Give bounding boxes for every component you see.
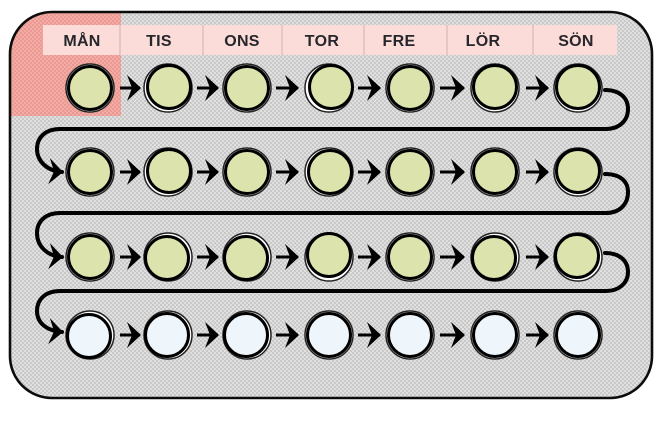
weekday header: MÅN xyxy=(63,31,101,50)
weekday header xyxy=(43,25,617,55)
day arrows xyxy=(120,88,548,335)
highlighted corner for current day xyxy=(10,12,121,116)
weekday header: ONS xyxy=(224,33,260,50)
weekday header: LÖR xyxy=(466,31,500,50)
weekday header: SÖN xyxy=(558,31,594,50)
weekday header: FRE xyxy=(383,33,415,50)
pills: inactive row xyxy=(66,311,602,359)
weekday header: TIS xyxy=(146,33,172,50)
row connectors xyxy=(37,90,628,332)
weekday header: TOR xyxy=(305,33,339,50)
pills: active rows xyxy=(66,64,602,281)
